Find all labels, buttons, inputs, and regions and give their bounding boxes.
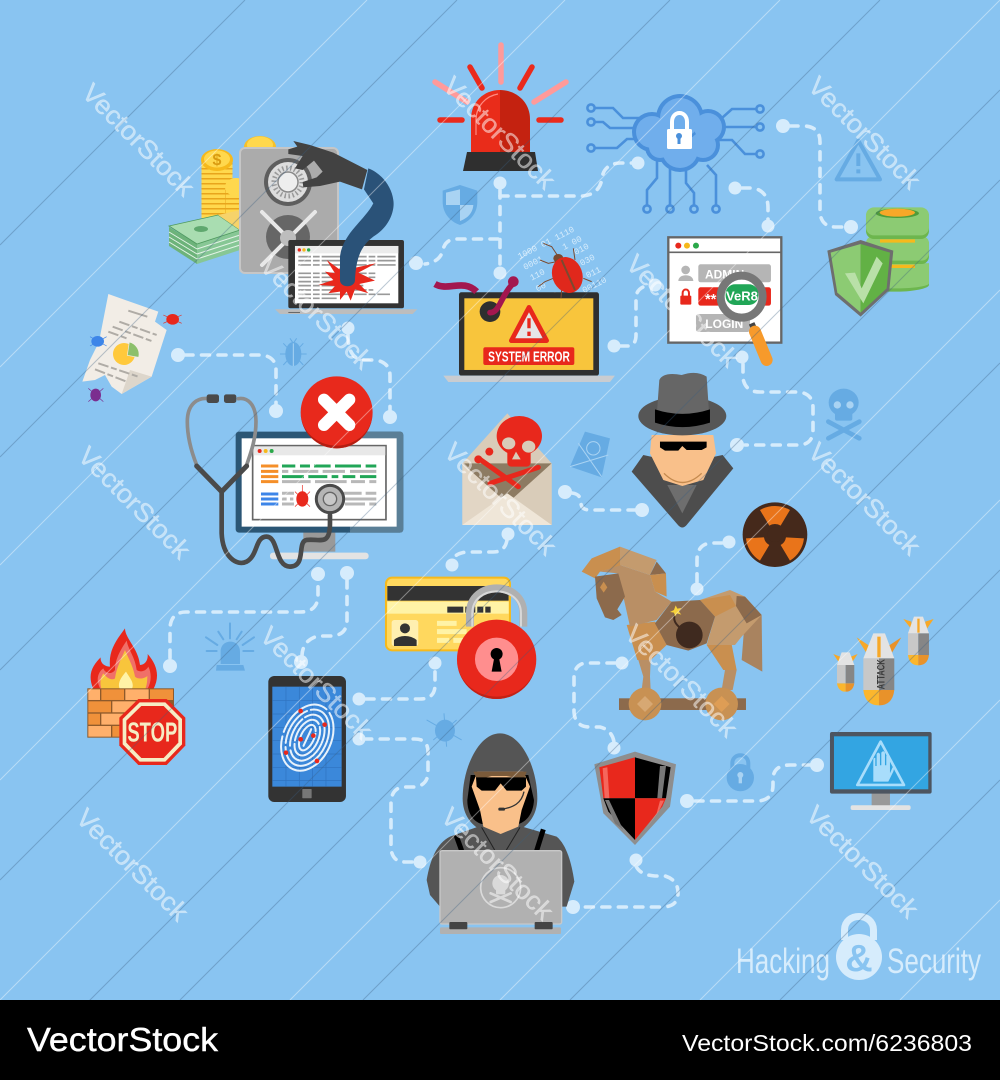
- code rows: [261, 466, 376, 504]
- watermark text: VectorStock: [76, 77, 201, 203]
- monitor stand: [303, 532, 335, 552]
- icon: monitor under diagnosis: [187, 376, 403, 567]
- circuit lines: [587, 104, 764, 213]
- binary digits: 110: [528, 267, 547, 283]
- front leg: [627, 622, 667, 661]
- red bug: [538, 243, 592, 298]
- binary digits: 001010: [547, 293, 579, 316]
- coat: [632, 455, 733, 527]
- pie chart: [113, 343, 135, 365]
- text lines: [95, 311, 157, 382]
- envelope back flap: [462, 413, 552, 525]
- binary digits: [516, 225, 608, 316]
- icon: database with green shield: [827, 207, 929, 317]
- cloud padlock: [672, 113, 687, 131]
- stop sign: STOP: [127, 716, 177, 747]
- flames: [91, 628, 157, 689]
- hacking word: Hacking: [736, 942, 830, 981]
- browser window: [668, 237, 781, 343]
- binary digits: 010: [572, 242, 591, 258]
- platform and wheels: [619, 698, 746, 710]
- siren base: [463, 152, 538, 171]
- laptop base: [440, 927, 561, 934]
- purple bug: [88, 388, 103, 402]
- siren dome: [471, 90, 500, 152]
- card body: [386, 578, 510, 650]
- safe dial: [264, 158, 312, 206]
- icon: hooded hacker with laptop: [427, 733, 574, 934]
- left coin stack: $: [213, 152, 222, 169]
- safe body: [240, 148, 338, 273]
- footer bar: [0, 1000, 1000, 1080]
- phone body: [268, 676, 346, 802]
- watermark text: VectorStock: [619, 618, 744, 744]
- icon: virus laptop with system error: [435, 225, 615, 382]
- horse head: [595, 573, 625, 620]
- left coin stack: [201, 149, 233, 218]
- siren rays: [435, 45, 566, 120]
- binary digits: 1000 01 1110: [516, 225, 576, 262]
- worm hole: [480, 301, 500, 322]
- middle attack bomb: ATTACK: [875, 659, 887, 689]
- safe handle: [262, 212, 315, 265]
- body: [427, 826, 574, 907]
- icon: shield red and black: [594, 752, 676, 845]
- logo padlock: [836, 916, 882, 980]
- icon: infected document: [82, 294, 182, 402]
- watermark text: VectorStock: [254, 250, 379, 376]
- faint icon: padlock: [727, 755, 754, 791]
- red bug on screen: [295, 485, 310, 507]
- sunglasses: [660, 442, 707, 451]
- icon: firewall with stop sign: [87, 628, 185, 765]
- face: [650, 435, 716, 486]
- paper sheet: [82, 294, 167, 394]
- monitor stand: [872, 793, 890, 806]
- binary digits: 00110: [581, 275, 608, 296]
- back coin stack: [244, 136, 276, 158]
- fingerprint: [271, 696, 344, 779]
- laptop lid: [440, 851, 562, 924]
- right bomb: [903, 617, 934, 665]
- faint icon: envelope: [570, 432, 610, 477]
- hoodie straps: [456, 829, 543, 851]
- watermark text: VectorStock: [72, 440, 197, 566]
- id photo: [392, 620, 418, 646]
- horse neck and mane: [600, 565, 672, 627]
- face: [472, 772, 530, 834]
- dashed connectors: [163, 119, 858, 914]
- icon: alarm siren: [435, 45, 566, 171]
- faint icon: skull and bones: [828, 389, 859, 438]
- red burst: [318, 257, 376, 301]
- binary digits: 100: [542, 290, 560, 306]
- skull and crossbones: [474, 416, 542, 487]
- icon: virus envelope: [462, 413, 552, 525]
- horse rear: [700, 590, 762, 645]
- warning triangle: [857, 742, 904, 785]
- watermark text: VectorStock: [254, 620, 379, 746]
- envelope front: [462, 463, 507, 525]
- watermark text: VectorStock: [437, 70, 562, 196]
- system error label: [483, 347, 574, 366]
- left bomb: [833, 652, 858, 692]
- watermark text: VectorStock: [802, 436, 927, 562]
- stop hand: [873, 751, 894, 782]
- horse tail: [742, 615, 762, 672]
- card lines: [437, 623, 467, 640]
- laptop body: [459, 292, 599, 376]
- icon: phone with fingerprint: [268, 676, 346, 802]
- horse belly: [655, 600, 715, 651]
- binary digits: 011: [584, 265, 603, 281]
- icon: trojan horse: [582, 547, 762, 720]
- green shield: [827, 240, 893, 317]
- cash stack: [169, 210, 240, 264]
- footer url: VectorStock.com/6236803: [682, 1030, 972, 1056]
- icon: hacker hand with arm: [275, 141, 417, 314]
- icon: cloud with lock and circuit: [587, 94, 764, 213]
- password field: **: [705, 292, 717, 308]
- system error label: SYSTEM ERROR: [488, 349, 570, 366]
- watermark text: VectorStock: [70, 802, 195, 928]
- back leg: [707, 644, 737, 670]
- cloud: [632, 94, 726, 172]
- faint icon: siren: [206, 623, 254, 671]
- binary digits: 00: [534, 281, 548, 294]
- footer brand: VectorStock: [27, 1021, 219, 1058]
- watermark text: VectorStock: [435, 801, 560, 927]
- faint icon: bug near hacker: [427, 713, 462, 747]
- stethoscope: [187, 398, 330, 567]
- watermark text: VectorStock: [438, 436, 563, 562]
- red bug: [163, 314, 182, 325]
- monitor frame: [830, 732, 932, 794]
- black glove: [288, 141, 367, 189]
- headset: [502, 792, 524, 809]
- icon: attack bombs: [833, 617, 934, 705]
- worms: [490, 283, 513, 313]
- faint icon: shield: [443, 185, 477, 225]
- icon: spy in hat: [632, 373, 733, 527]
- monitor frame: [236, 432, 403, 533]
- icon: radiation symbol: [743, 502, 807, 567]
- sunglasses: [476, 777, 526, 791]
- login button: LOGIN: [705, 317, 743, 331]
- small coin stack: [225, 178, 247, 218]
- bomb: [670, 605, 703, 648]
- watermark text: [70, 70, 927, 928]
- hat: [638, 397, 726, 435]
- logo: hacking and security: [736, 916, 981, 981]
- faint icon: warning triangle: [837, 141, 880, 179]
- binary digits: 030: [578, 253, 597, 269]
- watermark text: VectorStock: [800, 799, 925, 925]
- watermark text: VectorStock: [620, 248, 745, 374]
- bricks: [87, 688, 174, 738]
- database stack: [866, 263, 929, 292]
- binary digits: 1 00: [561, 234, 584, 253]
- warning triangle: [511, 307, 547, 341]
- arm sleeve: [340, 168, 394, 286]
- admin field: ADMIN: [705, 267, 744, 281]
- binary digits: 0001: [522, 254, 545, 273]
- watermark text: VectorStock: [802, 70, 927, 196]
- faint icon: bug near stethoscope: [280, 338, 307, 366]
- laptop behind arm: [275, 240, 417, 314]
- icon: login window with magnifier: [668, 237, 781, 360]
- icon: credit card with padlock: [386, 578, 536, 699]
- magnifier: VeR8: [726, 290, 758, 304]
- blue bug: [90, 336, 107, 347]
- red error button: [301, 376, 373, 448]
- logo padlock: &: [845, 938, 873, 980]
- icon: coins, cash and safe: [169, 136, 338, 273]
- padlock: [457, 588, 536, 699]
- browser window: [253, 446, 386, 520]
- icon: stop monitor: [830, 732, 932, 810]
- hood: [463, 733, 537, 829]
- skull emblem: [481, 868, 521, 908]
